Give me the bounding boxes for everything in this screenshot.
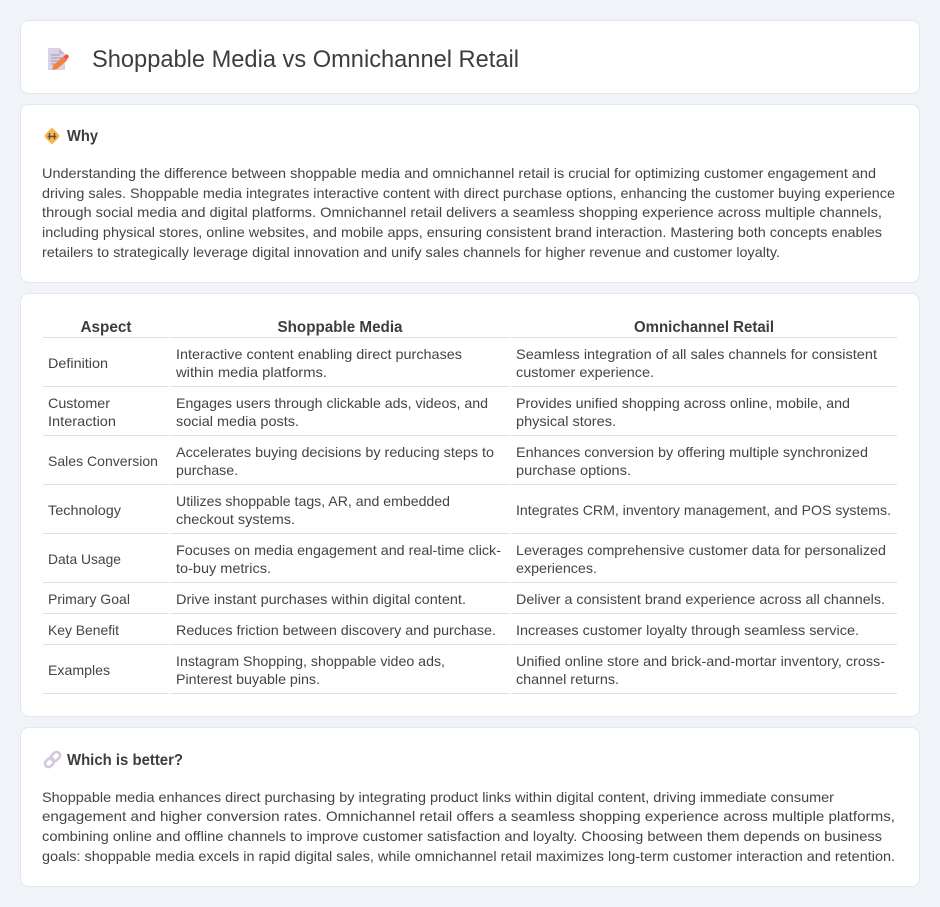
- row: customer interaction: physical stores.: [516, 413, 616, 429]
- row: primary goal: Primary Goal: [48, 591, 130, 607]
- heading: why: Why: [67, 128, 98, 145]
- row: customer interaction: Interaction: [48, 413, 116, 429]
- row: examples: Examples: [48, 662, 110, 678]
- row: sales conversion: Accelerates buying decisions by reducing steps to: [176, 444, 494, 460]
- row: technology: Technology: [48, 502, 121, 518]
- row: definition: [48, 346, 877, 380]
- row: data usage: to-buy metrics.: [176, 560, 271, 576]
- row: sales conversion: Sales Conversion: [48, 453, 158, 469]
- table header: [80, 319, 774, 336]
- row: primary goal: [48, 591, 885, 607]
- row: customer interaction: Provides unified shopping across online, mobile, and: [516, 395, 850, 411]
- which is better paragraph: engagement and higher conversion rates. Omnichannel retail offers a seamless shopping experience across multiple platforms,: [42, 808, 895, 824]
- row: key benefit: Reduces friction between discovery and purchase.: [176, 622, 496, 638]
- table header: Shoppable Media: [278, 319, 403, 336]
- row: technology: Utilizes shoppable tags, AR, and embedded: [176, 493, 450, 509]
- which is better paragraph: combining online and offline channels to improve customer satisfaction and loyalty. Choosing between them depends on business: [42, 828, 882, 844]
- row: sales conversion: [48, 444, 868, 478]
- why paragraph: [42, 165, 895, 260]
- row: data usage: experiences.: [516, 560, 597, 576]
- why paragraph: driving sales. Shoppable media integrates interactive content with direct purchase options, enhancing the customer buying experience: [42, 185, 895, 201]
- row: examples: Unified online store and brick-and-mortar inventory, cross-: [516, 653, 885, 669]
- which is better paragraph: [42, 789, 895, 864]
- row: definition: within media platforms.: [175, 364, 327, 380]
- row: data usage: Leverages comprehensive customer data for personalized: [516, 542, 886, 558]
- row: sales conversion: Enhances conversion by offering multiple synchronized: [516, 444, 868, 460]
- row: definition: Definition: [48, 355, 108, 371]
- row: key benefit: Key Benefit: [48, 622, 119, 638]
- why paragraph: Understanding the difference between shoppable media and omnichannel retail is crucial for optimizing customer engagement and: [42, 165, 876, 181]
- row: primary goal: Drive instant purchases within digital content.: [176, 591, 466, 607]
- table header: Omnichannel Retail: [634, 319, 774, 336]
- row: examples: Instagram Shopping, shoppable video ads,: [176, 653, 445, 669]
- row: customer interaction: Engages users through clickable ads, videos, and: [176, 395, 488, 411]
- table header: Aspect: [80, 319, 132, 336]
- icon: document with pencil: [48, 48, 69, 70]
- row: examples: [48, 653, 885, 687]
- why paragraph: including physical stores, online websites, and mobile apps, ensuring consistent brand interaction. Mastering both concepts enables: [42, 224, 882, 240]
- row: definition: Seamless integration of all sales channels for consistent: [516, 346, 877, 362]
- row: technology: Integrates CRM, inventory management, and POS systems.: [516, 502, 891, 518]
- row: data usage: Focuses on media engagement and real-time click-: [176, 542, 501, 558]
- row: key benefit: [48, 622, 859, 638]
- row: technology: [48, 493, 891, 527]
- row: technology: checkout systems.: [176, 511, 295, 527]
- row: sales conversion: purchase options.: [516, 462, 631, 478]
- panel: comparison table: [20, 294, 920, 716]
- why paragraph: retailers to strategically leverage digital innovation and unify sales channels for higher revenue and customer loyalty.: [42, 244, 780, 260]
- heading: which is better: Which is better?: [67, 752, 183, 769]
- icon: link: [43, 750, 62, 769]
- why paragraph: through social media and digital platforms. Omnichannel retail delivers a seamless shopping experience across multiple channels,: [42, 204, 882, 220]
- row: primary goal: Deliver a consistent brand experience across all channels.: [516, 591, 885, 607]
- row: sales conversion: purchase.: [176, 462, 238, 478]
- icon: warning sign: [44, 128, 60, 144]
- panel: why: [20, 104, 920, 282]
- row: customer interaction: [48, 395, 850, 429]
- row: customer interaction: social media posts.: [176, 413, 299, 429]
- row: examples: Pinterest buyable pins.: [176, 671, 320, 687]
- row: data usage: [48, 542, 886, 576]
- row: key benefit: Increases customer loyalty through seamless service.: [516, 622, 859, 638]
- row: definition: Interactive content enabling direct purchases: [176, 346, 462, 362]
- panel: title: [20, 20, 920, 94]
- which is better paragraph: goals: shoppable media excels in rapid digital sales, while omnichannel retail maximizes long-term customer interaction and retention.: [42, 848, 895, 864]
- panel: which is better: [20, 728, 920, 886]
- row: data usage: Data Usage: [48, 551, 121, 567]
- which is better paragraph: Shoppable media enhances direct purchasing by integrating product links within digital content, driving immediate consumer: [42, 789, 834, 805]
- row: customer interaction: Customer: [48, 395, 110, 411]
- row: examples: channel returns.: [516, 671, 619, 687]
- title text: Shoppable Media vs Omnichannel Retail: [92, 46, 519, 73]
- row: definition: customer experience.: [516, 364, 654, 380]
